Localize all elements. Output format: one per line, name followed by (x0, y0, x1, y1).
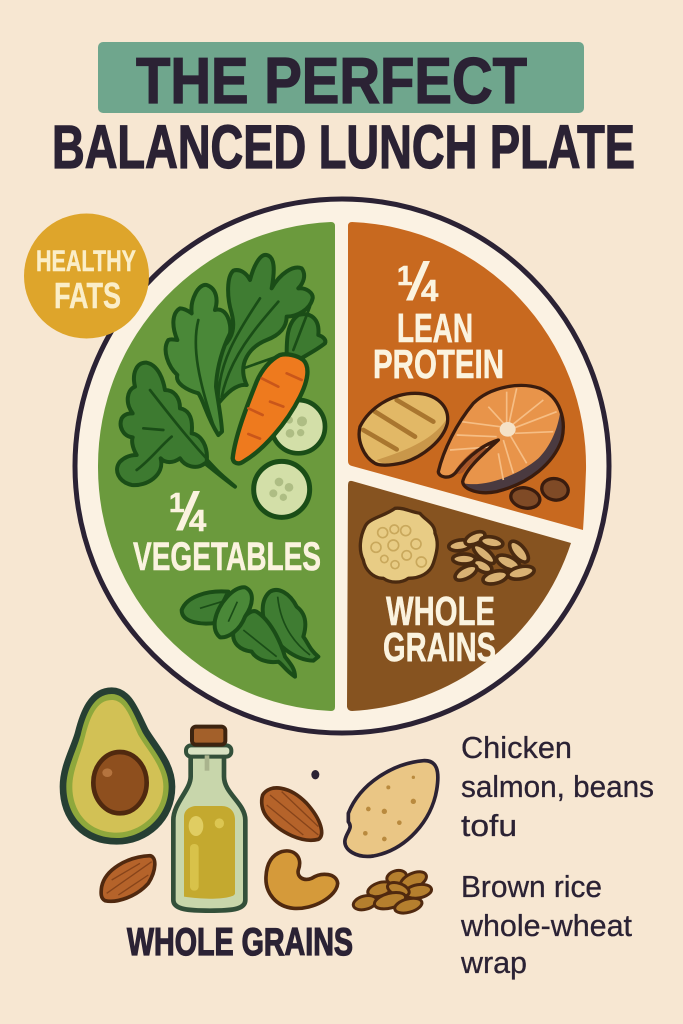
icon: grilled chicken (359, 393, 448, 465)
fraction label (397, 252, 439, 312)
icon: walnut pile (352, 868, 433, 916)
fraction label: / (406, 252, 430, 312)
vegetables label: VEGETABLES (133, 535, 321, 579)
icon: left leaf (166, 285, 230, 435)
fraction label: 1 (397, 260, 413, 291)
lean label: LEAN (397, 305, 473, 351)
icon: leaf veins (137, 298, 310, 485)
icon: salmon steak (438, 385, 563, 493)
icon: avocado (62, 689, 173, 843)
text block: grain examples: Brown rice (461, 869, 602, 904)
fraction label: 4 (421, 273, 439, 308)
icon: spinach centre leaf (233, 611, 295, 677)
icon: cashew (266, 851, 338, 908)
icon: grain kernels (448, 529, 535, 586)
bottom label: WHOLE GRAINS (127, 921, 353, 964)
icon: tahini bread piece (345, 761, 438, 856)
icon: spinach front leaf (215, 587, 252, 637)
healthy fats badge: HEALTHY (36, 245, 136, 278)
icon: beans (509, 476, 570, 511)
healthy fats badge: FATS (54, 275, 121, 316)
panel: vegetables (98, 222, 335, 711)
protein label: PROTEIN (373, 341, 504, 387)
icon: cucumber slice two (254, 461, 310, 517)
icon: cucumber slice one (272, 400, 325, 453)
text block: grain examples (460, 869, 632, 980)
panel: lean protein (348, 222, 586, 530)
icon: large leaf (216, 255, 313, 403)
fraction label: 4 (189, 503, 207, 538)
text block: protein examples (461, 730, 654, 843)
text block: protein examples: salmon, beans (461, 769, 654, 804)
text block: grain examples: wrap (460, 945, 527, 980)
icon: almond two (101, 856, 155, 901)
icon: spinach leaves (182, 587, 318, 677)
whole label: WHOLE (386, 588, 495, 634)
icon: spinach veins (200, 597, 310, 657)
healthy fats foods (62, 689, 438, 916)
icon: carrot (233, 354, 307, 463)
icon: dot (311, 770, 319, 779)
icon: grain patty (360, 508, 437, 582)
fraction label: / (176, 482, 200, 542)
fraction label: 1 (169, 487, 185, 518)
icon: almond one (262, 788, 322, 840)
fraction label (169, 482, 207, 542)
icon: lower left leaf (117, 363, 235, 487)
icon: spinach left leaf (182, 591, 228, 624)
grains label: GRAINS (383, 624, 496, 670)
icon: spinach right leaf (263, 590, 318, 661)
healthy fats badge (24, 214, 149, 338)
panel: whole grains (347, 481, 571, 711)
icon: olive oil bottle (173, 727, 245, 911)
title banner: THE PERFECT (136, 44, 527, 117)
text block: protein examples: tofu (461, 808, 517, 843)
text block: grain examples: whole-wheat (460, 908, 632, 943)
text block: protein examples: Chicken (461, 730, 572, 765)
plate (75, 199, 609, 733)
icon: small leaf behind carrot (287, 314, 325, 360)
icon: leafy greens (117, 255, 325, 517)
